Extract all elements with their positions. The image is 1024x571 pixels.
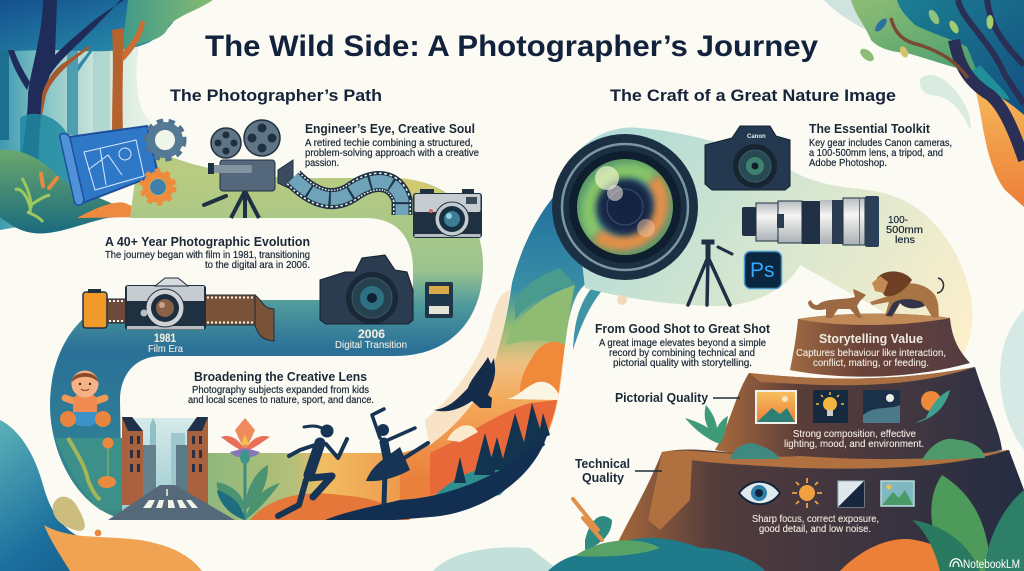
icon: large camera lens xyxy=(552,134,698,280)
background: bottom right pale wash xyxy=(1000,310,1024,450)
label: 100-500mm lens xyxy=(886,215,923,246)
text: Storytelling Value: Captures behaviour like interaction, xyxy=(796,348,946,359)
label: 1981 film era: Film Era xyxy=(148,343,183,355)
foreground foliage bottom right xyxy=(548,475,1024,571)
text block: Engineer's Eye: Engineer’s Eye, Creative Soul xyxy=(305,122,475,136)
icon: DSLR with SD card xyxy=(320,255,453,324)
icon: sun exposure xyxy=(792,478,822,508)
label: Technical Quality xyxy=(575,457,662,485)
text block: Broadening the Creative Lens: and local scenes to nature, sport, and dance. xyxy=(188,395,374,406)
icon: blueprint with gears xyxy=(60,122,183,205)
section heading: The Photographer's Path: The Photographer’s Path xyxy=(170,86,382,105)
text block: From Good Shot to Great Shot xyxy=(595,322,771,369)
text block: 40+ year evolution: A 40+ Year Photographic Evolution xyxy=(105,235,310,249)
scene: field strip under broadening section xyxy=(208,453,400,520)
label: 100-500mm lens: 500mm xyxy=(886,225,923,236)
section heading: The Craft of a Great Nature Image: The Craft of a Great Nature Image xyxy=(610,86,896,105)
text: Storytelling Value: Storytelling Value xyxy=(819,332,923,346)
icon: eye xyxy=(739,482,780,504)
text block: Essential Toolkit: a 100-500mm lens, a tripod, and xyxy=(809,148,943,159)
ribbon: lens stream through the mountains xyxy=(395,170,640,520)
text block: 40+ year evolution: The journey began with film in 1981, transitioning xyxy=(105,250,310,261)
icon: Photoshop xyxy=(744,252,782,288)
icon: runner silhouette xyxy=(278,424,347,516)
background: top right tree xyxy=(824,0,1024,207)
text: Sharp focus xyxy=(752,514,879,535)
text block: Essential Toolkit: The Essential Toolkit xyxy=(809,122,931,136)
text: Storytelling Value xyxy=(796,332,946,369)
label: 100-500mm lens: 100- xyxy=(888,215,908,226)
icon: telephoto lens xyxy=(742,196,879,247)
pyramid: rock middle tier xyxy=(715,367,1002,459)
text: Sharp focus: good detail, and low noise. xyxy=(759,524,871,535)
icon: compact camera xyxy=(413,189,482,238)
label: Technical Quality: Quality xyxy=(582,471,624,485)
label: Pictorial Quality: Pictorial Quality xyxy=(615,391,708,405)
text block: Engineer's Eye: A retired techie combining a structured, xyxy=(305,138,473,149)
text block: Essential Toolkit: Adobe Photoshop. xyxy=(809,158,887,169)
icon: detail contrast xyxy=(838,481,864,507)
icon: Photoshop: Ps xyxy=(750,259,775,282)
text: Strong composition: Strong composition, effective xyxy=(793,429,916,440)
icon: noise picture xyxy=(881,481,914,506)
text block: 40+ year evolution: to the digital ara in 2006. xyxy=(205,260,310,271)
text block: Engineer's Eye: problem-solving approach with a creative xyxy=(305,148,479,159)
icon: eagle silhouette xyxy=(434,357,495,411)
scene: city street xyxy=(108,417,235,520)
text: Storytelling Value: conflict, mating, or feeding. xyxy=(813,358,929,369)
text block: Engineer's Eye xyxy=(305,122,479,169)
path ribbon: upper band turning into lower band xyxy=(50,143,483,520)
text block: From Good Shot to Great Shot: A great image elevates beyond a simple xyxy=(599,338,766,349)
label: 1981 film era xyxy=(148,331,183,355)
background: bottom left blobs xyxy=(0,420,560,571)
icon: Canon DSLR: Canon xyxy=(747,134,766,140)
text block: Broadening the Creative Lens: Photography subjects expanded from kids xyxy=(192,385,369,396)
title: The Wild Side: A Photographer’s Journey xyxy=(205,30,818,63)
panel: pale blob under the toolkit xyxy=(570,127,973,360)
text: Strong composition xyxy=(784,429,924,450)
icon: flower xyxy=(217,418,280,520)
decorative bushes on ledges xyxy=(685,405,985,460)
icon: lighting bulb xyxy=(813,390,848,423)
icon: dancer silhouette xyxy=(366,409,428,505)
background: left forest xyxy=(0,0,213,233)
icon: film movie camera xyxy=(204,120,293,218)
icon: mood moon xyxy=(863,390,900,423)
text: Sharp focus: Sharp focus, correct exposure, xyxy=(752,514,879,525)
scene: dark silhouette ground xyxy=(325,432,548,520)
text block: From Good Shot to Great Shot: pictorial quality with storytelling. xyxy=(613,358,752,369)
icon: environment leaf xyxy=(915,390,950,423)
text block: Essential Toolkit xyxy=(809,122,952,169)
text block: 40+ year evolution xyxy=(105,235,310,271)
icon: tripod xyxy=(688,240,732,305)
scene: left foliage xyxy=(55,438,122,510)
scene: orange hill xyxy=(250,493,410,520)
icons: fox and lion on the summit xyxy=(808,271,944,318)
pyramid: rock base tier xyxy=(612,449,1024,571)
label: 100-500mm lens: lens xyxy=(895,235,915,246)
label: 1981 film era: 1981 xyxy=(154,331,176,345)
pyramid: rock top tier xyxy=(790,314,970,377)
text block: Broadening the Creative Lens: Broadening the Creative Lens xyxy=(194,370,367,384)
icon: baby xyxy=(60,370,111,427)
icon: composition picture xyxy=(756,391,796,423)
icon: Canon DSLR xyxy=(705,126,790,190)
icon: film strip xyxy=(293,178,402,215)
text block: Engineer's Eye: passion. xyxy=(305,158,339,169)
text: Strong composition: lighting, mood, and environment. xyxy=(784,439,924,450)
text block: From Good Shot to Great Shot: record by combining technical and xyxy=(609,348,755,359)
text block: Broadening the Creative Lens xyxy=(188,370,374,406)
text block: From Good Shot to Great Shot: From Good Shot to Great Shot xyxy=(595,322,771,336)
label: Technical Quality: Technical xyxy=(575,457,630,471)
icon: 35mm film roll and camera xyxy=(83,278,274,341)
text block: Essential Toolkit: Key gear includes Canon cameras, xyxy=(809,138,952,149)
label: 2006 digital transition: Digital Transition xyxy=(335,339,407,351)
label: 2006 digital transition xyxy=(335,327,407,351)
label: 2006 digital transition: 2006 xyxy=(358,327,385,341)
